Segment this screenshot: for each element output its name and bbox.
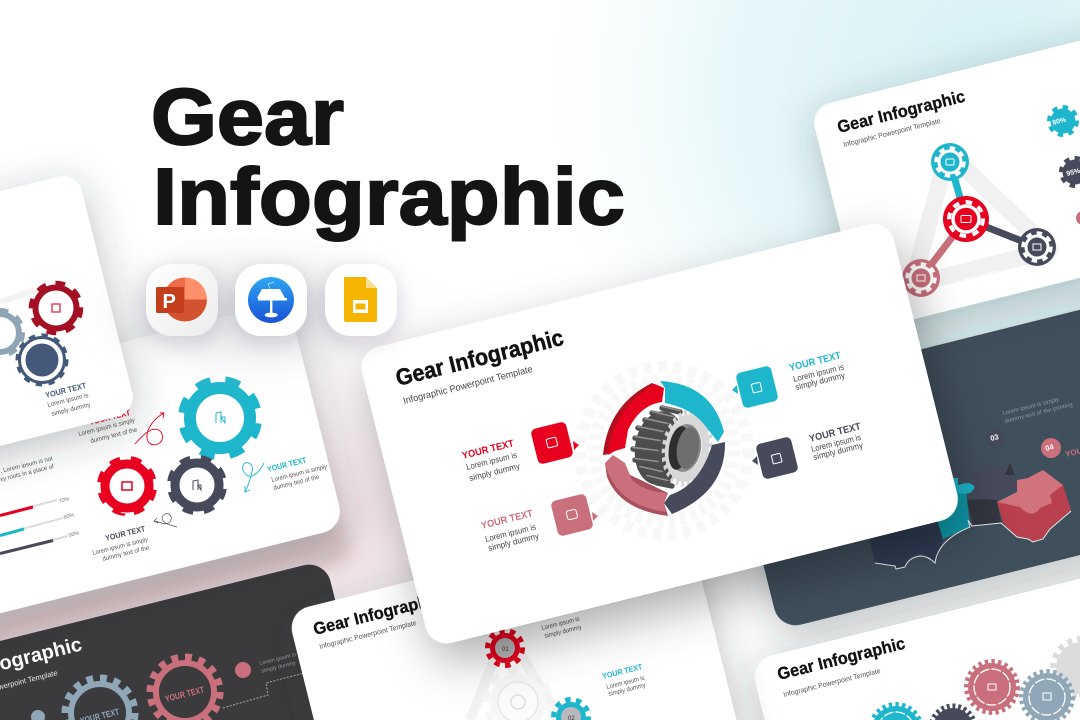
node: dark bbox=[1018, 228, 1056, 266]
text block: Lorem ipsum is simply bbox=[1002, 397, 1060, 417]
process labels bbox=[911, 171, 1013, 286]
process labels: PROCESS bbox=[964, 270, 999, 286]
label: pink: Lorem ipsum is bbox=[484, 522, 537, 544]
bar: 70%: 70% bbox=[58, 496, 70, 505]
label: pink: simply dummy bbox=[487, 530, 541, 553]
gear: cyan bbox=[177, 375, 263, 461]
label: red: YOUR TEXT bbox=[88, 408, 131, 427]
subheading: Infographic Powerpoint Template bbox=[842, 116, 942, 149]
node: pink bbox=[902, 259, 940, 297]
puzzle: navy bbox=[860, 480, 943, 569]
label: cyan bbox=[788, 350, 847, 392]
label: dark: Lorem ipsum is simply bbox=[92, 536, 149, 557]
bar: 90% bbox=[0, 530, 80, 554]
label: cyan: Lorem ipsum is bbox=[606, 675, 646, 691]
badge: 03: 03 bbox=[989, 432, 1000, 443]
panel: colour gears slide bottom right bbox=[750, 564, 1080, 720]
gear: pink bbox=[966, 662, 1018, 712]
label: cyan bbox=[266, 456, 328, 492]
panel: dark gears slide bottom left bbox=[0, 560, 400, 720]
label bbox=[541, 616, 583, 640]
wheel: gear bbox=[630, 406, 715, 488]
icon: PowerPoint bbox=[146, 264, 218, 336]
label: dark: dummy text of the bbox=[102, 544, 150, 563]
title: Gear bbox=[151, 72, 344, 161]
wheel: red segment bbox=[603, 383, 664, 455]
panel: main slide bbox=[357, 219, 963, 648]
puzzle outline bbox=[875, 511, 1071, 569]
gear slats bbox=[633, 406, 680, 486]
label: dark bbox=[92, 524, 150, 563]
panel: gears with bars slide left bbox=[0, 301, 344, 624]
gear: cyan 02 bbox=[554, 700, 588, 720]
gear: red 01 bbox=[488, 630, 522, 666]
gear: dark bbox=[931, 706, 975, 720]
icon: PowerPoint: P bbox=[162, 291, 176, 313]
gear: dark red bbox=[31, 283, 81, 333]
text block: dummy text of the printing bbox=[1004, 402, 1073, 425]
arrow: dark scribble bbox=[154, 514, 177, 527]
label: cyan: Lorem ipsum is bbox=[792, 362, 845, 384]
subheading: Infographic Powerpoint Template bbox=[782, 666, 882, 699]
icon: blue badge bbox=[31, 710, 45, 720]
arrow: red scribble bbox=[135, 413, 164, 445]
panel: puzzle gear dark slide right bbox=[722, 288, 1080, 630]
label: navy bbox=[44, 381, 92, 418]
label: simply dummy bbox=[544, 624, 583, 640]
node: red bbox=[943, 196, 989, 242]
label: dark: Lorem ipsum is bbox=[810, 432, 862, 454]
process track bbox=[912, 152, 1050, 285]
label: cyan: Lorem ipsum is simply bbox=[271, 463, 328, 484]
wheel: pink segment bbox=[605, 455, 668, 516]
subheading: Infographic Powerpoint Template bbox=[318, 618, 418, 651]
heading: Gear Infographic bbox=[835, 87, 967, 137]
title bbox=[151, 72, 625, 241]
subheading: Infographic Powerpoint Template bbox=[402, 364, 534, 407]
process labels: PROCESS bbox=[984, 171, 1013, 201]
heading: Gear Infographic bbox=[311, 589, 443, 639]
label: dark: YOUR TEXT bbox=[104, 524, 146, 543]
label: red bbox=[78, 408, 138, 445]
badge: 04 bbox=[1041, 438, 1061, 458]
callout: red bbox=[530, 421, 579, 465]
label: cyan: dummy text of the bbox=[273, 474, 320, 492]
label: navy: simply dummy bbox=[51, 401, 92, 418]
badge: 80% bbox=[1049, 107, 1077, 135]
bar: 60%: 60% bbox=[63, 512, 75, 521]
gear: navy bbox=[18, 336, 66, 384]
arrow: cyan scribble bbox=[243, 463, 264, 492]
panel: three gears slide top left bbox=[0, 172, 137, 484]
callout: dark bbox=[752, 436, 799, 480]
label: cyan: YOUR TEXT bbox=[601, 662, 643, 681]
puzzle: dark bbox=[967, 463, 1017, 525]
label: dark bbox=[808, 421, 865, 462]
process labels: PROCESS bbox=[911, 200, 926, 235]
puzzle: red bbox=[997, 470, 1071, 542]
gear: pink bbox=[150, 657, 220, 720]
text block: Lorem ipsum is bbox=[259, 652, 297, 667]
label: navy: Lorem ipsum is bbox=[47, 392, 90, 409]
label: cyan: YOUR TEXT bbox=[266, 456, 307, 474]
gear face bbox=[659, 409, 715, 487]
bar: 90%: 90% bbox=[68, 530, 80, 539]
badge: 95% bbox=[1061, 158, 1080, 186]
icon: pink badge bbox=[235, 662, 251, 678]
gear: grey blue bbox=[0, 310, 23, 356]
gear: blue grey bbox=[65, 678, 135, 720]
icon: Keynote bbox=[235, 264, 307, 336]
badge: 04: 04 bbox=[1044, 442, 1055, 453]
label: cyan: YOUR TEXT bbox=[788, 350, 842, 374]
badge: 80%: 80% bbox=[1052, 117, 1068, 127]
label: red: dummy text of the bbox=[90, 426, 138, 445]
label: cyan bbox=[601, 662, 647, 698]
title: Infographic bbox=[153, 152, 625, 241]
gear: blue grey bbox=[1022, 672, 1072, 720]
badge: 03 bbox=[986, 428, 1006, 448]
wheel: cyan segment bbox=[660, 381, 724, 442]
connectors bbox=[921, 162, 1037, 278]
process track bbox=[470, 640, 560, 720]
heading: Gear Infographic bbox=[393, 324, 566, 391]
bar: 70% bbox=[0, 496, 70, 516]
gear: red 01: 01 bbox=[502, 647, 509, 653]
text block: bars intro: xy roots in a place of bbox=[0, 464, 55, 483]
bar: 60% bbox=[0, 512, 75, 536]
label: pink: YOUR TEXT bbox=[480, 508, 534, 532]
label: navy: YOUR TEXT bbox=[44, 381, 87, 400]
gear: cyan bbox=[870, 704, 922, 720]
label: cyan: simply dummy bbox=[794, 370, 847, 392]
gear hole bbox=[665, 422, 705, 474]
wheel: dark segment bbox=[664, 442, 725, 514]
icon: Google Slides bbox=[325, 264, 397, 336]
faint doodle ring bbox=[580, 367, 748, 535]
label: red: YOUR TEXT bbox=[461, 438, 515, 462]
puzzle: teal bbox=[930, 478, 975, 539]
label: cyan: simply dummy bbox=[608, 682, 647, 698]
callout: cyan bbox=[732, 365, 779, 409]
label: dark: YOUR TEXT bbox=[808, 421, 862, 445]
label: red bbox=[461, 438, 522, 483]
badge: pink bbox=[1076, 211, 1080, 225]
gear: faint centre bbox=[486, 670, 550, 720]
label: dark: simply dummy bbox=[812, 440, 865, 462]
label: pink bbox=[480, 508, 541, 553]
gear body bbox=[630, 408, 690, 488]
gear: pink: YOUR TEXT bbox=[164, 684, 206, 704]
label: red: Lorem ipsum is simply bbox=[78, 417, 136, 438]
text block: simply dummy bbox=[261, 660, 297, 675]
faint arrow bbox=[0, 290, 36, 302]
heading: Gear Infographic bbox=[775, 634, 907, 684]
label: red: Lorem ipsum is bbox=[465, 450, 518, 472]
gear: dark bbox=[166, 454, 228, 516]
label: red: simply dummy bbox=[468, 460, 522, 483]
connector bbox=[223, 673, 304, 708]
node: cyan bbox=[931, 143, 969, 181]
panel: process slide bottom centre bbox=[287, 513, 743, 720]
label: Lorem ipsum is bbox=[541, 616, 581, 632]
callout: pink bbox=[550, 493, 598, 537]
panel: triangle process slide top right bbox=[810, 11, 1080, 331]
icon shadow haze bbox=[120, 268, 380, 352]
gear: red bbox=[96, 455, 158, 517]
gear: light grey bbox=[1053, 639, 1080, 697]
